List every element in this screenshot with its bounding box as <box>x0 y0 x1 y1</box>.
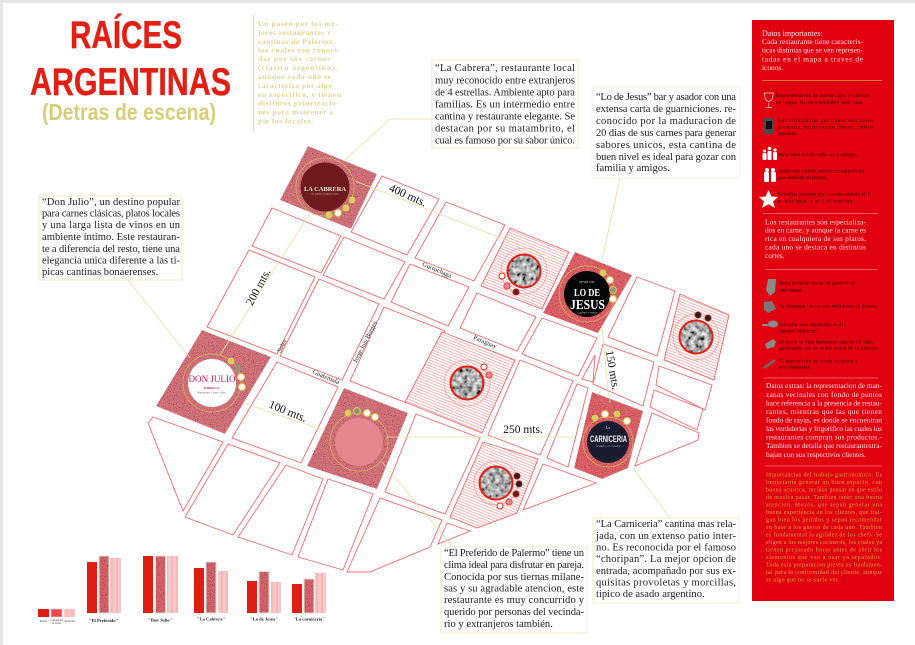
restaurant: La Cabrera <box>296 158 355 219</box>
bar group: Don Julio <box>143 556 178 622</box>
callout: La Carniceria <box>593 518 739 603</box>
legend text: fernet <box>778 119 874 137</box>
intro text: aunque cada uno se <box>258 72 332 81</box>
restaurant: La Carniceria: PARRILLA Y CARNES <box>596 445 620 448</box>
restaurant: La Cabrera: the argentine steakhouse house <box>311 192 339 196</box>
callout: Don Julio: para carnes clásicas, platos locales <box>42 208 180 220</box>
callout: La Carniceria: jada, con un extenso patio inter- <box>595 531 736 542</box>
restaurant: Don Julio <box>183 354 245 412</box>
intro text: las cuales son conoci- <box>258 46 340 54</box>
legend text: couple: Ambiente calido mejor recomendado <box>778 170 864 174</box>
legend text: choripan <box>780 323 844 334</box>
callout: La Cabrera <box>432 60 578 148</box>
dotted blocks: restaurants <box>156 146 643 489</box>
icon: family <box>762 147 777 160</box>
chart legend: la carne <box>52 622 62 625</box>
callout: Don Julio: y una larga lista de vinos en un <box>42 220 181 231</box>
intro text: Un paseo por los me- <box>258 19 338 28</box>
icon: couple <box>764 168 776 182</box>
callout: Don Julio: te a diferencia del resto, tiene una <box>42 244 180 255</box>
intro text <box>254 15 342 131</box>
text: extra data: Tambien se detalla que restaurantestra- <box>766 441 883 450</box>
callout: El Preferido de Palermo: querido por personas del vecinda- <box>444 607 584 618</box>
text: specialised in meat: cada uno se destaca en distintos <box>765 242 866 252</box>
heading: Datos importantes <box>762 29 864 72</box>
text: specialised in meat <box>765 218 867 260</box>
restaurant: Don Julio: Restaurante. Carnes. Vinos. <box>198 392 227 394</box>
icon: matambrito <box>764 360 775 368</box>
subtitle: (Detras de escena) <box>42 99 216 125</box>
legend text: roast meat: Toda la carne asada en general es <box>779 282 855 286</box>
street map blocks <box>148 176 712 572</box>
callout: Lo de Jesus: familia y amigos. <box>596 163 670 174</box>
chart legend <box>38 609 75 625</box>
text: gastronomic work <box>766 472 883 584</box>
callout: El Preferido de Palermo: sas y su agradable atencion, este <box>444 584 584 594</box>
intro text: en especifico, y tienen <box>258 90 342 99</box>
text: extra data: rantes, mientras que las que tienen <box>766 407 882 416</box>
icon: choripan <box>762 320 778 328</box>
callout: Don Julio <box>39 196 182 280</box>
bar group: El Preferido <box>87 556 121 623</box>
text: gastronomic work: tienen preparado horas antes de abrir los <box>766 548 883 554</box>
legend text: vacio <box>779 340 879 352</box>
legend text: matambrito <box>779 360 858 370</box>
callout: El Preferido de Palermo: restaurante es muy concurrido y <box>444 595 585 606</box>
legend text: stars: el mas bajo, y el 5 el maximo. <box>778 200 854 204</box>
restaurant: El Preferido de Palermo <box>330 408 388 471</box>
text: extra data <box>766 381 883 459</box>
callout: El Preferido de Palermo: “El Preferido de Palermo” tiene un <box>444 548 585 559</box>
text: gastronomic work: elementos que van a usar ya separados. <box>766 555 883 561</box>
legend text: drinks: Representacion de buena carta y calidad <box>776 94 870 99</box>
callout: Lo de Jesus: conocido por la maduracion de <box>596 116 736 127</box>
intro text: (clasico argentino), <box>258 63 337 72</box>
callout: El Preferido de Palermo: clima ideal para disfrutar en pareja. <box>444 560 584 571</box>
callout: La Carniceria: quisitas provoletas y morcillas, <box>596 578 736 588</box>
icon: milanesa <box>764 301 776 313</box>
chart legend: Precio <box>40 620 48 623</box>
callout: Don Julio: picas cantinas bonaerenses. <box>42 267 158 278</box>
legend text: roast meat: muy buena. <box>779 288 802 294</box>
callout: La Carniceria: tipico de asado argentino. <box>596 589 705 600</box>
chart legend: Calidad de <box>50 619 63 622</box>
title <box>30 13 231 104</box>
bar group: Lo de Jesus: "Lo de Jesus" <box>250 616 278 622</box>
supplier marker 2 <box>444 360 492 406</box>
text: gastronomic work: gan bien los pedidos y sepan recomendar <box>766 518 882 524</box>
icon: roast meat <box>766 279 776 296</box>
callout: El Preferido de Palermo: rio y extranjeros también. <box>444 619 553 630</box>
text: specialised in meat: Los restaurantes son especializa- <box>765 218 867 226</box>
callout: La Cabrera: de 4 estrellas. Ambiente apto para <box>435 88 575 98</box>
icon: fernet bottle <box>763 118 774 134</box>
panel: important data sidebar <box>752 20 894 601</box>
legend text: drinks <box>776 94 870 106</box>
intro text: jores restaurantes y <box>257 28 331 37</box>
text: specialised in meat: dos en carne, y aunque la carne es <box>765 226 866 234</box>
heading: Datos importantes: Datos importantes: <box>762 29 823 38</box>
text: gastronomic work: en base a los gustos de cada uno. Tambien <box>766 525 882 531</box>
distance label: 150 mts: 150 mts. <box>603 350 621 391</box>
restaurant: Lo de Jesus: LO DE <box>574 288 600 299</box>
text: extra data: Datos extras: la representacion de man- <box>766 381 883 390</box>
callout: Lo de Jesus <box>592 87 740 178</box>
callout: Lo de Jesus: extensa carta de guarniciones. re- <box>596 104 736 115</box>
callout: La Cabrera: familias. Es un intermedio entre <box>435 100 575 110</box>
legend text: fernet: Los restaurantes que tienen este icono <box>778 119 874 124</box>
icon: star <box>759 190 778 208</box>
street label: Jorge Luis Borges: Jorge luis Borges <box>352 320 379 364</box>
text: extra data: fondo de rayas, es donde se encuentran <box>766 416 882 424</box>
callout: Don Julio: elegancia unica diferente a las ti- <box>42 256 180 266</box>
icon: wine glass <box>764 93 774 108</box>
distance label: 400 mts: 400 mts. <box>387 182 428 210</box>
text: gastronomic work: atencion. Mozos, que sepan generar una <box>766 502 882 508</box>
restaurant: Lo de Jesus: JESUS <box>570 298 605 313</box>
intro text: nes para mantener a <box>258 108 333 116</box>
callout: El Preferido de Palermo: Conocida por sus tiernas milane- <box>444 572 584 583</box>
restaurant: La Carniceria <box>583 411 633 467</box>
street label: Paraguay: Paraguay <box>472 334 498 351</box>
text: gastronomic work: Toda esta preparacion previa es fundamen- <box>766 562 882 568</box>
legend text: milanesa: Se destacan las tiernas milanesas de peceto. <box>779 304 878 310</box>
text: extra data: bajan con sus respectivos clientes. <box>766 450 866 459</box>
distance label: 250 mts: 250 mts. <box>503 424 543 436</box>
text: specialised in meat: cortes. <box>765 251 785 260</box>
text: extra data: restaurantes compran sus productos.- <box>766 432 883 442</box>
legend text: vacio: El vacio se deja fermentar mas de 20 dias, <box>779 340 873 346</box>
callout: Lo de Jesus: 20 dias de sus carnes para generar <box>596 128 736 139</box>
supplier marker 3 <box>673 312 719 360</box>
text: extra data: las verdulerias y frigorifico las cuales los <box>766 424 882 433</box>
bar group: El Preferido: "El Preferido" <box>89 618 119 623</box>
text: gastronomic work: tal para la conformidad del cliente, aunque <box>766 569 882 576</box>
restaurant: La Cabrera: LA CABRERA <box>304 186 346 193</box>
text: gastronomic work: buena experiencia en los clientes, que trai- <box>766 510 882 516</box>
legend text: fernet: argentino. <box>778 132 798 137</box>
callout: Don Julio: ambiente íntimo. Este restauran- <box>42 232 180 243</box>
text: gastronomic work: buena acustica, incluso pensar en que estilo <box>766 488 882 494</box>
leader lines <box>128 119 670 547</box>
text: gastronomic work: eligen a los mejores cocineros, los cuales ya <box>766 540 882 546</box>
heading: Datos importantes: tadas en el mapa a traves de <box>762 54 864 64</box>
restaurant: Lo de Jesus: DESDE 1992 <box>579 281 595 284</box>
distance label: 100 mts: 100 mts. <box>267 399 308 425</box>
heading: Datos importantes: iconos. <box>762 63 783 72</box>
intro text: das por sus carnes <box>258 54 330 63</box>
restaurant: Lo de Jesus: CARNES Y VINOS <box>577 312 598 314</box>
restaurant: La Carniceria: CARNICERIA <box>590 434 627 444</box>
bar group: La carniceria <box>292 573 326 622</box>
street label: Gurruchaga: Gurruchaga <box>421 261 453 280</box>
callout: Lo de Jesus: “Lo de Jesus” bar y asador con una <box>596 92 736 103</box>
intro text: distintos priorizacio- <box>258 98 339 108</box>
callout: La Cabrera: “La Cabrera”, restaurante local <box>435 63 575 74</box>
bar group: La Cabrera: "La Cabrera" <box>197 616 225 622</box>
legend text: fernet: presentes, hacen buenos fernets, clasico <box>778 126 874 130</box>
title: ARGENTINAS <box>30 61 231 104</box>
bar group: La carniceria: "La carniceria" <box>293 616 325 622</box>
callout: El Preferido de Palermo <box>441 547 587 633</box>
callout: La Carniceria: “choripan”. La mejor opcion de <box>596 554 736 565</box>
callout: Lo de Jesus: buen nivel es ideal para gozar con <box>596 152 737 163</box>
legend text: matambrito: este restaurante. <box>779 366 811 370</box>
intro text: pie los locales. <box>258 116 313 126</box>
text: gastronomic work: de musica pasar. Tambien tener una buena <box>766 495 882 501</box>
callout: La Carniceria: “La Carniceria” cantina mas rela- <box>596 519 736 530</box>
callout: Lo de Jesus: sabores unicos, esta cantina de <box>596 140 736 151</box>
legend text: vacio: generando asi un sabor unico de la cantina. <box>779 346 879 352</box>
legend text: couple: para disfrutar en parejas. <box>778 176 827 181</box>
restaurant: Don Julio: PARRILLA <box>204 386 221 390</box>
text: extra data: zanas vecinales con fondo de puntos <box>766 390 882 399</box>
callout: Don Julio: “Don Julio”, un destino popular <box>42 197 180 208</box>
intro text: cantinas de Palermo, <box>258 37 335 46</box>
legend text: stars <box>778 192 870 204</box>
text: gastronomic work: Importancias del trabajo gastronomico: Es <box>766 472 883 478</box>
street label: Soler: Soler <box>276 338 289 354</box>
legend text: couple <box>778 170 864 181</box>
restaurant: La Carniceria: La <box>606 425 610 430</box>
legend text: family: Apto para ir con familias y amigos. <box>778 153 858 158</box>
distance label: 200 mts: 200 mts. <box>244 267 274 308</box>
bar group: La Cabrera <box>194 562 228 622</box>
icon: vacio <box>765 339 776 349</box>
callout: La Cabrera: destacan por su matambrito, el <box>435 124 575 134</box>
supplier marker 4 <box>474 461 522 509</box>
striped blocks: suppliers <box>405 228 729 528</box>
legend text: drinks: de tragos. Es recomendable pedir uno. <box>776 101 864 106</box>
legend text: choripan: El corte mas recurrado es el <box>780 323 844 328</box>
legend text: roast meat <box>779 282 855 294</box>
restaurant: Lo de Jesus <box>559 266 616 322</box>
callout: La Cabrera: muy reconocido entre extranjeros <box>435 76 575 86</box>
callout: La Carniceria: entrada, acompañado por sus ex- <box>596 566 736 577</box>
callout: La Cabrera: cantina y restaurante elegante. Se <box>435 112 575 122</box>
text: specialised in meat: rica en cualquiera de sus platos, <box>765 234 866 243</box>
street label: Guatemala: Guatemala <box>311 369 340 386</box>
text: gastronomic work: es fundamental la agilidez de los chefs. Se <box>766 532 882 538</box>
text: gastronomic work: importante generar un buen espacio, con <box>766 480 882 486</box>
bar group: Lo de Jesus <box>247 571 281 622</box>
callout: La Carniceria: no. Es reconocida por el famoso <box>596 542 736 554</box>
legend text: stars: Estrellas puestas por clientes siendo el 1 <box>778 192 870 198</box>
legend text: matambrito: El matambrito de cerdo se destaca <box>779 360 858 364</box>
bar group: Don Julio: "Don Julio" <box>148 618 173 622</box>
title: RAÍCES <box>70 13 182 57</box>
supplier marker 1 <box>499 248 547 295</box>
callout: La Cabrera: cual es famoso por su sabor único. <box>435 136 575 146</box>
text: gastronomic work: es algo que no se suele ver. <box>766 578 840 584</box>
restaurant: Don Julio: DON JULIO <box>188 374 236 384</box>
legend text: choripan: famoso "choripan". <box>780 330 819 334</box>
heading: Datos importantes: ticas distintas que se ven represen- <box>762 46 864 54</box>
intro text: caracteriza por algo <box>258 81 332 90</box>
heading: Datos importantes: Cada restaurante tiene caracteris- <box>762 37 864 46</box>
text: extra data: hace referencia a la presencia de restau- <box>766 398 883 408</box>
chart legend: Atención <box>64 620 75 623</box>
